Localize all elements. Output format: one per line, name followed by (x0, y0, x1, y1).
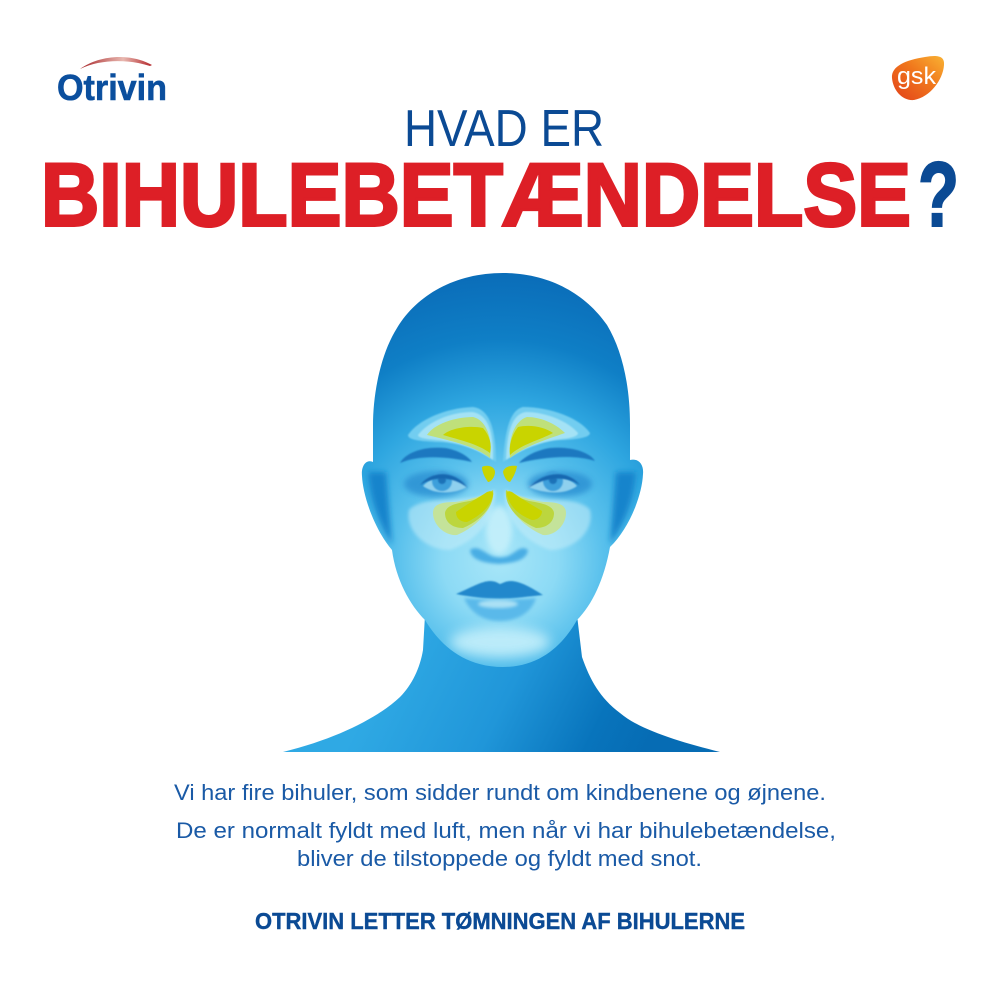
lips (456, 581, 543, 621)
logo wordmark: Otrivin (57, 67, 167, 108)
right frontal sinus core (510, 426, 553, 455)
right maxillary halo (505, 490, 591, 550)
question mark: ? (918, 144, 959, 246)
left frontal sinus outer halo (408, 407, 496, 462)
right maxillary core (507, 491, 542, 520)
right frontal sinus middle (510, 417, 565, 458)
frontal sinuses (408, 407, 590, 462)
ethmoid sinuses (482, 466, 517, 482)
right ethmoid sinus (503, 466, 517, 482)
nostril shadow (470, 548, 528, 564)
eye socket shadow (528, 471, 592, 497)
eye white (528, 477, 577, 492)
lower lip (464, 598, 536, 621)
right maxillary middle (506, 490, 554, 528)
gsk wordmark: gsk (897, 63, 937, 90)
nose (470, 506, 528, 564)
nose bridge highlight (486, 506, 512, 554)
heading word in red: BIHULEBETÆNDELSE (41, 144, 911, 244)
pupil (438, 476, 446, 484)
right eye (528, 471, 592, 497)
maxillary sinuses (408, 490, 591, 550)
eyebrows (400, 448, 595, 463)
logo: GSK (892, 56, 944, 100)
lash line (528, 474, 580, 488)
left eyebrow (400, 448, 472, 463)
right ear shadow (610, 472, 636, 544)
logo: Otrivin (57, 57, 167, 108)
left ear shadow (368, 472, 392, 545)
lower lip highlight (478, 600, 518, 608)
gsk orange badge (892, 56, 944, 100)
left eye (404, 471, 468, 497)
shading on face (368, 472, 636, 657)
paragraph line 1: Vi har fire bihuler, som sidder rundt om kindbenene og øjnene. (174, 780, 826, 805)
eye white (423, 477, 467, 492)
left frontal sinus middle (427, 417, 491, 458)
closing statement: OTRIVIN LETTER TØMNINGEN AF BIHULERNE (255, 908, 745, 934)
iris (543, 471, 563, 491)
paragraph line 3: bliver de tilstoppede og fyldt med snot. (297, 846, 702, 871)
left maxillary outer (433, 490, 493, 535)
head and face base (362, 273, 643, 667)
logo swoosh (80, 57, 152, 69)
left frontal sinus pale ring (418, 412, 493, 460)
right frontal sinus outer halo (503, 407, 590, 462)
left maxillary middle (445, 490, 493, 528)
iris (432, 471, 452, 491)
right eyebrow (519, 448, 595, 463)
left maxillary core (456, 491, 493, 522)
body text (174, 780, 836, 871)
upper lip (456, 581, 543, 599)
neck and shoulders (283, 615, 720, 752)
paragraph line 2: De er normalt fyldt med luft, men når vi har bihulebetændelse, (176, 818, 836, 843)
eye socket shadow (404, 471, 468, 497)
left ethmoid sinus (482, 466, 495, 482)
main heading (41, 144, 959, 246)
right maxillary outer (507, 490, 566, 535)
lash line (420, 474, 468, 488)
chin highlight (450, 627, 550, 657)
illustration: blue face with sinuses (283, 273, 720, 752)
pupil (549, 476, 557, 484)
right frontal sinus pale ring (506, 412, 578, 460)
heading line: HVAD ER: HVAD ER (404, 100, 604, 158)
left maxillary halo (408, 490, 495, 550)
left frontal sinus core (443, 427, 491, 453)
